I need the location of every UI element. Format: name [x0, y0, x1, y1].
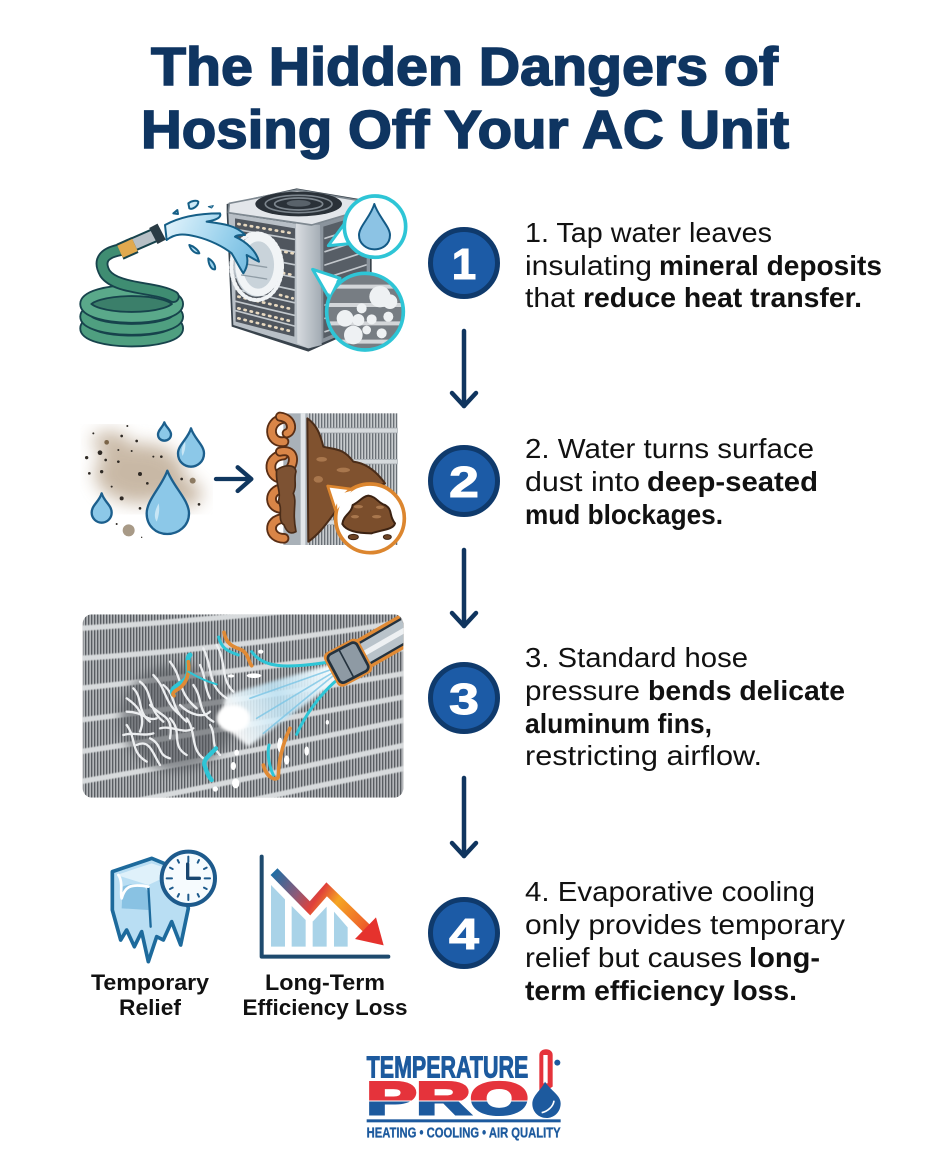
nozzle: [322, 629, 407, 689]
icon: thermometer: [532, 1049, 561, 1118]
callout: mineral deposits: [313, 269, 403, 350]
icon: AC unit: [227, 188, 372, 352]
label: temporary relief: Temporary: [91, 970, 209, 995]
text: step 2: deep-seated: [647, 466, 818, 497]
title: [141, 37, 789, 160]
illustration: hose pressure bending fins: [82, 614, 404, 798]
number badge 3: [430, 664, 498, 732]
text: step 3: restricting airflow.: [525, 740, 762, 771]
number badge 4: [430, 900, 498, 966]
bent fin highlights: [172, 632, 290, 780]
icon: coil with mud blockage: [271, 413, 397, 545]
text: step 4: long-: [749, 942, 820, 973]
label: efficiency loss: [242, 970, 408, 1020]
text: step 2: mud blockages.: [525, 499, 723, 530]
label: efficiency loss: Efficiency Loss: [242, 995, 408, 1020]
text: step 2: dust into: [525, 466, 640, 497]
logo: Temperature Pro: [367, 1049, 561, 1142]
title: Hosing Off Your AC Unit: [141, 100, 789, 160]
label: temporary relief: [91, 970, 209, 1020]
panel: aluminum fin photo: [82, 614, 404, 798]
text: step 1: insulating: [525, 250, 652, 281]
logo: Temperature Pro: PRO: [367, 1073, 528, 1124]
number badge 2: [430, 448, 498, 514]
text: step 1: [525, 217, 882, 313]
water jet: [213, 650, 338, 792]
number badge 2: 2: [449, 458, 479, 507]
illustration: hose spraying AC unit: [86, 188, 406, 352]
icon: dust cloud: [85, 425, 202, 538]
number badge 1: [430, 230, 498, 296]
icon: melting ice cube: [112, 858, 188, 962]
number badge 4: 4: [449, 910, 480, 959]
arrow: step 1 to 2: [452, 331, 476, 406]
text: step 2: [525, 433, 818, 530]
icon: clock: [162, 852, 215, 905]
logo: Temperature Pro: HEATING • COOLING • AIR QUALITY: [367, 1126, 561, 1142]
arrow: dust to mud: [216, 467, 251, 491]
text: step 3: 3. Standard hose: [525, 642, 748, 673]
text: step 4: only provides temporary: [525, 909, 845, 940]
chart: falling efficiency: [262, 857, 388, 957]
logo: Temperature Pro: TEMPERATURE: [367, 1051, 528, 1085]
illustration: temporary relief vs efficiency loss: [112, 852, 388, 962]
text: step 4: relief but causes: [525, 942, 742, 973]
text: step 3: aluminum fins,: [525, 708, 712, 739]
arrow: step 3 to 4: [452, 778, 476, 856]
callout: water drop: [328, 196, 406, 257]
label: efficiency loss: Long-Term: [265, 970, 385, 995]
text: step 1: reduce heat transfer.: [583, 282, 862, 313]
text: step 1: mineral deposits: [659, 250, 882, 281]
icon: water spray: [165, 201, 259, 273]
mineral crust patch: [231, 233, 282, 300]
text: step 2: 2. Water turns surface: [525, 433, 814, 464]
callout: mud close-up: [328, 484, 404, 553]
number badge 3: 3: [449, 675, 479, 724]
text: step 3: pressure: [525, 675, 640, 706]
number badge 1: 1: [452, 240, 476, 289]
label: temporary relief: Relief: [119, 995, 182, 1020]
text: step 3: [525, 642, 845, 771]
text: step 3: bends delicate: [648, 675, 845, 706]
illustration: dust plus water becomes mud: [85, 413, 404, 553]
icons: water drops: [92, 422, 204, 534]
text: step 4: 4. Evaporative cooling: [525, 876, 815, 907]
title: The Hidden Dangers of: [151, 37, 779, 97]
text: step 1: that: [525, 282, 575, 313]
text: step 1: 1. Tap water leaves: [525, 217, 772, 248]
text: step 4: term efficiency loss.: [525, 975, 797, 1006]
icon: coiled garden hose: [86, 232, 178, 341]
arrow: step 2 to 3: [452, 550, 476, 626]
text: step 4: [525, 876, 845, 1006]
